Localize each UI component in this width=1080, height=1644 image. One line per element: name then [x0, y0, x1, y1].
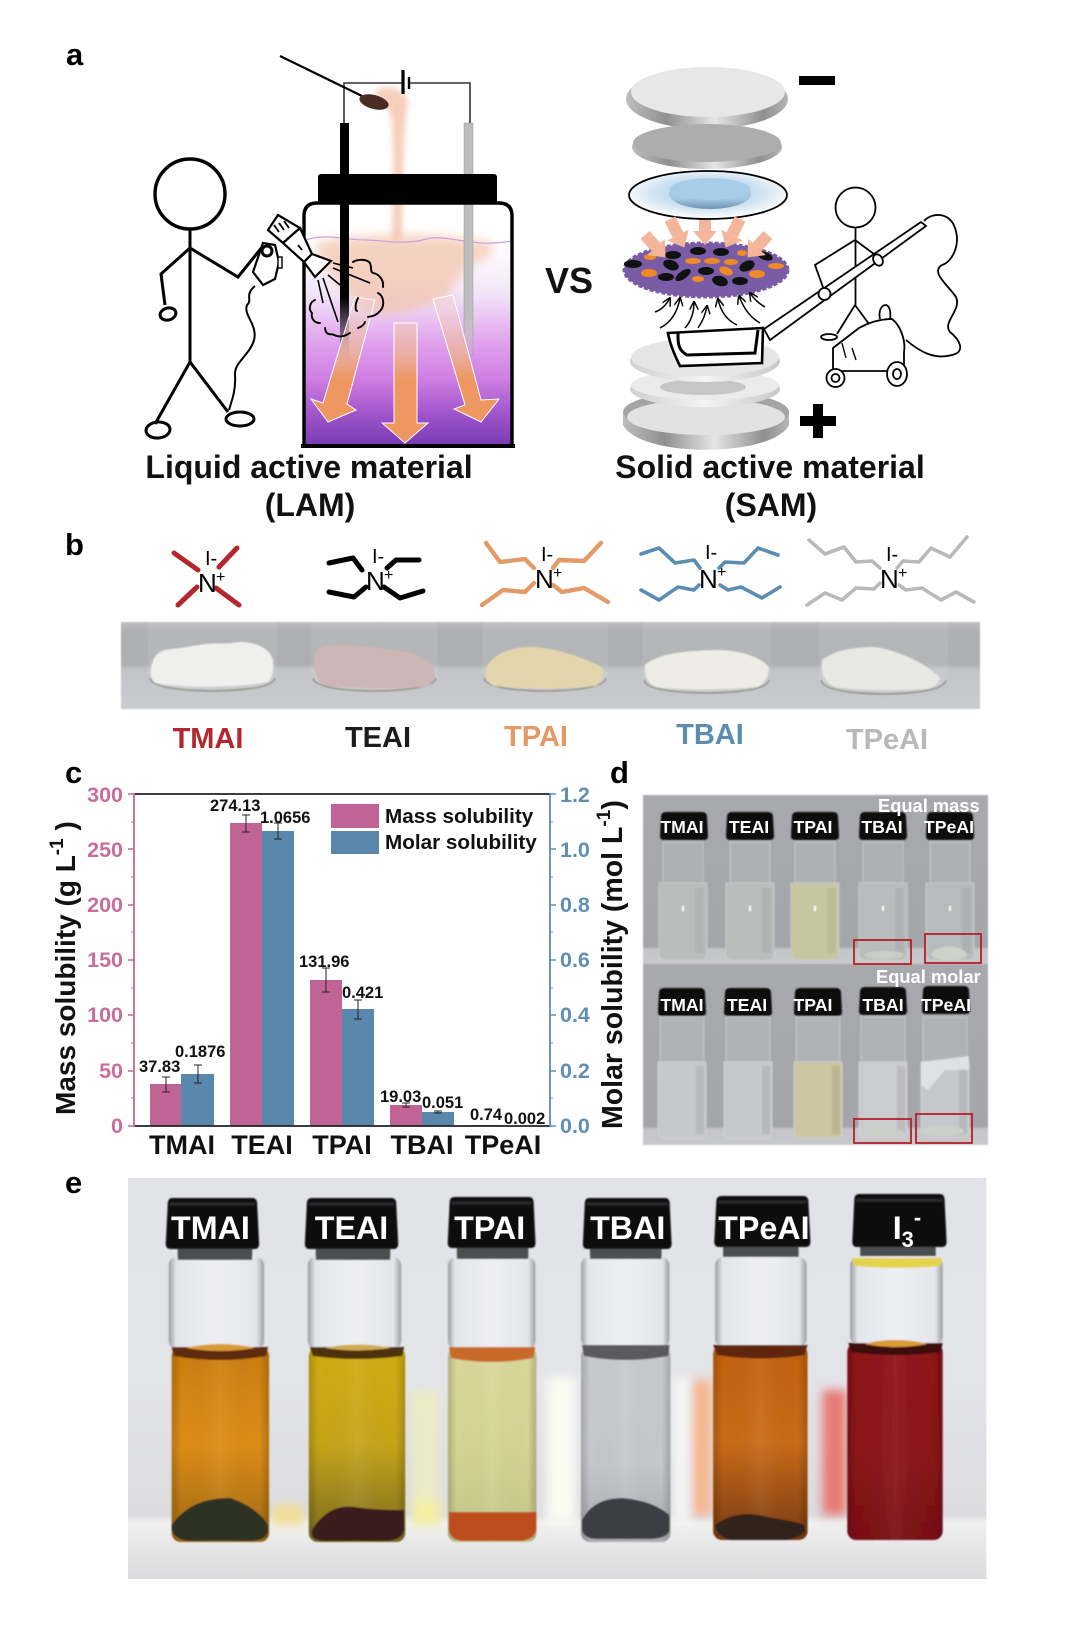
right axis title: -1 [594, 809, 615, 827]
liquid active material caption: Liquid active material [145, 449, 473, 485]
bar value labels: 37.83 [139, 1058, 180, 1076]
compound name labels: TMAI [173, 723, 243, 755]
salmon flow arrows [645, 219, 768, 247]
jar lid [318, 174, 497, 204]
left tick labels: 300 [87, 783, 123, 807]
equal mass heading and vial labels: TPeAI [924, 817, 974, 837]
mass solubility bars [150, 823, 502, 1126]
red highlight boxes [854, 934, 981, 1143]
right tick labels: 1.2 [560, 783, 590, 807]
top metal cap [626, 67, 788, 129]
VS label: VS [545, 260, 593, 301]
equal mass heading and vial labels: TBAI [861, 817, 903, 837]
vial: I3- [847, 1194, 947, 1540]
vial cap labels: - [914, 1205, 921, 1230]
left black electrode [340, 123, 349, 365]
equal molar heading and vial labels [660, 966, 981, 1015]
structure: TPeAI: I- [886, 544, 898, 566]
solid active material caption [615, 449, 925, 523]
equal mass heading and vial labels: TEAI [729, 817, 769, 837]
cell liquid [305, 241, 512, 445]
vials equal molar [658, 986, 970, 1138]
plus terminal [800, 404, 836, 438]
liquid active material caption [145, 449, 473, 523]
panel label: d: d [610, 755, 629, 790]
powder: TPeAI [822, 647, 940, 690]
compound name labels: TEAI [345, 722, 411, 754]
compound name labels: TPeAI [846, 724, 928, 756]
vial glass [148, 622, 948, 694]
vial bottom rings [150, 678, 946, 694]
bar value labels: 0.1876 [175, 1043, 225, 1061]
left tick labels: 100 [87, 1003, 123, 1027]
structure: TPAI: N [535, 564, 554, 594]
vacuum floor head [668, 328, 763, 366]
vacuum body [833, 319, 904, 371]
vial: TEAI [305, 1198, 405, 1542]
powder: TPAI [485, 647, 603, 688]
error bars [162, 815, 442, 1113]
powder: TEAI [314, 645, 435, 688]
bar value labels: 131.96 [299, 953, 349, 971]
left axis title: ) [50, 821, 81, 838]
powder: TBAI [645, 650, 769, 689]
left axis title: -1 [47, 838, 68, 855]
arrow: right diffusion [433, 295, 499, 422]
vial: TPAI [448, 1197, 536, 1542]
structure: TPeAI: + [898, 565, 907, 582]
structure: TEAI [329, 546, 423, 598]
left tick labels: 50 [99, 1059, 123, 1083]
x-axis category labels: TMAI [149, 1130, 215, 1160]
right gray electrode [464, 123, 473, 355]
equal molar heading and vial labels: Equal molar [876, 966, 981, 987]
compound name labels: TPAI [504, 721, 568, 753]
molecular structures [174, 537, 974, 605]
vacuum wheels [887, 362, 907, 386]
right tick labels: 0.2 [560, 1059, 590, 1083]
left tick labels: 250 [87, 838, 123, 862]
x-axis category labels: TEAI [231, 1130, 293, 1160]
structure: TPeAI [807, 537, 974, 605]
left tick labels: 200 [87, 893, 123, 917]
structure: TBAI: N [699, 564, 718, 594]
equal mass heading and vial labels: TMAI [660, 817, 704, 837]
right tick labels: 0.8 [560, 893, 590, 917]
left tick labels: 150 [87, 948, 123, 972]
structure: TEAI: + [384, 567, 393, 584]
equal mass heading and vial labels [660, 795, 980, 837]
spacer disc [632, 124, 782, 169]
vials equal mass [659, 812, 974, 960]
equal molar heading and vial labels: TPAI [794, 995, 832, 1015]
stick person with vacuum cleaner [668, 188, 960, 387]
x-axis category labels: TPeAI [465, 1130, 541, 1160]
spring disc [630, 370, 780, 407]
left axis title: Mass solubility (g L [50, 855, 81, 1115]
right axis title: ) [597, 800, 629, 810]
heat gun [253, 215, 331, 285]
jar outline [304, 203, 512, 445]
x-axis category labels [149, 1130, 541, 1160]
bar value labels: 19.03 [380, 1088, 421, 1106]
dissolved plume [316, 87, 495, 314]
right tick labels: 0.6 [560, 948, 590, 972]
bar value labels [139, 797, 545, 1128]
x-axis category labels: TBAI [390, 1130, 454, 1160]
bar value labels: 0.74 [470, 1106, 503, 1124]
structure: TPAI: + [553, 565, 562, 582]
bar value labels: 0.421 [342, 984, 383, 1002]
legend: Molar solubility [385, 831, 537, 854]
bottom metal case [623, 391, 789, 450]
left tick labels: 0 [111, 1114, 123, 1138]
structure: TBAI: I- [705, 542, 717, 564]
vial cap labels: TPAI [454, 1210, 525, 1246]
structure: TMAI [174, 548, 239, 605]
bar value labels: 0.002 [504, 1110, 545, 1128]
panel a left: liquid active material cell [280, 56, 515, 448]
liquid surface line [306, 237, 512, 243]
bar chart: solubility [47, 783, 629, 1160]
powder: TMAI [151, 642, 273, 687]
solid active material caption: Solid active material [615, 449, 925, 485]
powder vial photo strip [121, 622, 980, 709]
arrow: left diffusion [311, 297, 375, 422]
equal molar heading and vial labels: TBAI [862, 995, 904, 1015]
vial: TBAI [581, 1198, 672, 1542]
vial photo: equal mass and equal molar [643, 795, 988, 1145]
vacuum tube [764, 222, 926, 340]
separator with blue disc [629, 171, 787, 219]
vacuum hose [906, 215, 960, 357]
equal mass heading and vial labels: TPAI [794, 817, 832, 837]
vial cap labels: 3 [902, 1227, 914, 1252]
vial cap labels: TBAI [590, 1210, 665, 1246]
stick person with heat gun [145, 159, 383, 439]
molar solubility bars [181, 831, 454, 1126]
compound name labels [173, 719, 928, 756]
minus terminal [799, 76, 835, 85]
vial cap labels: I [893, 1210, 902, 1246]
purple electrode composite [624, 243, 788, 297]
vial: TMAI [166, 1198, 269, 1542]
equal molar heading and vial labels: TPeAI [921, 995, 971, 1015]
structure: TPeAI: N [880, 564, 899, 594]
liquid active material caption: (LAM) [265, 487, 355, 523]
bar value labels: 274.13 [210, 797, 260, 815]
equal molar heading and vial labels: TMAI [660, 995, 704, 1015]
left tick labels [87, 783, 123, 1138]
structure: TBAI: + [717, 564, 726, 581]
panel label: b: b [65, 527, 84, 562]
spoon with powder [280, 56, 390, 113]
right axis [550, 793, 556, 1127]
equal molar heading and vial labels: TEAI [727, 995, 767, 1015]
vial cap labels: TPeAI [718, 1210, 810, 1246]
vial cap labels [171, 1205, 921, 1252]
bar value labels: 1.0656 [260, 809, 310, 827]
structure: TBAI [641, 542, 780, 600]
structure: TEAI: N [366, 566, 385, 596]
arrow: centre diffusion [382, 323, 428, 443]
small black flow arrows [655, 293, 765, 328]
vial cap labels: TMAI [171, 1210, 250, 1246]
iodine solution vial photo [128, 1178, 986, 1579]
photo background [128, 1178, 986, 1579]
lower disc [630, 338, 780, 382]
spray cloud [310, 260, 383, 336]
vial cap labels: TEAI [315, 1210, 388, 1246]
coloured light reflections [272, 1377, 846, 1526]
structure: TMAI: N [198, 568, 217, 598]
right tick labels: 1.0 [560, 838, 590, 862]
structure: TPAI: I- [541, 544, 553, 566]
orange active particles [641, 250, 784, 282]
left axis [128, 793, 134, 1127]
black carbon particles [624, 247, 774, 288]
structure: TMAI: + [216, 569, 225, 586]
panel a right: solid active material stack [623, 67, 836, 450]
structure: TEAI: I- [372, 546, 384, 568]
photo background [643, 795, 988, 1145]
circuit wiring and battery [344, 70, 470, 123]
power cord [229, 286, 255, 410]
plot frame [134, 794, 550, 1126]
vial: TPeAI [713, 1196, 810, 1540]
solid active material caption: (SAM) [725, 487, 817, 523]
structure: TPAI [482, 543, 608, 605]
legend [331, 804, 537, 854]
compound name labels: TBAI [676, 719, 744, 751]
bar value labels: 0.051 [422, 1094, 463, 1112]
right tick labels: 0.0 [560, 1114, 590, 1138]
spray lines [318, 263, 370, 322]
right tick labels [560, 783, 590, 1138]
legend: Mass solubility [385, 805, 534, 828]
equal mass heading and vial labels: Equal mass [878, 795, 980, 816]
panel label: a: a [66, 37, 84, 72]
jar base [301, 444, 515, 448]
right axis title: Molar solubility (mol L [597, 827, 629, 1129]
panel label: e: e [65, 1165, 82, 1200]
panel label: c: c [65, 755, 82, 790]
right tick labels: 0.4 [560, 1003, 590, 1027]
structure: TMAI: I- [205, 548, 217, 570]
x-axis category labels: TPAI [312, 1130, 372, 1160]
